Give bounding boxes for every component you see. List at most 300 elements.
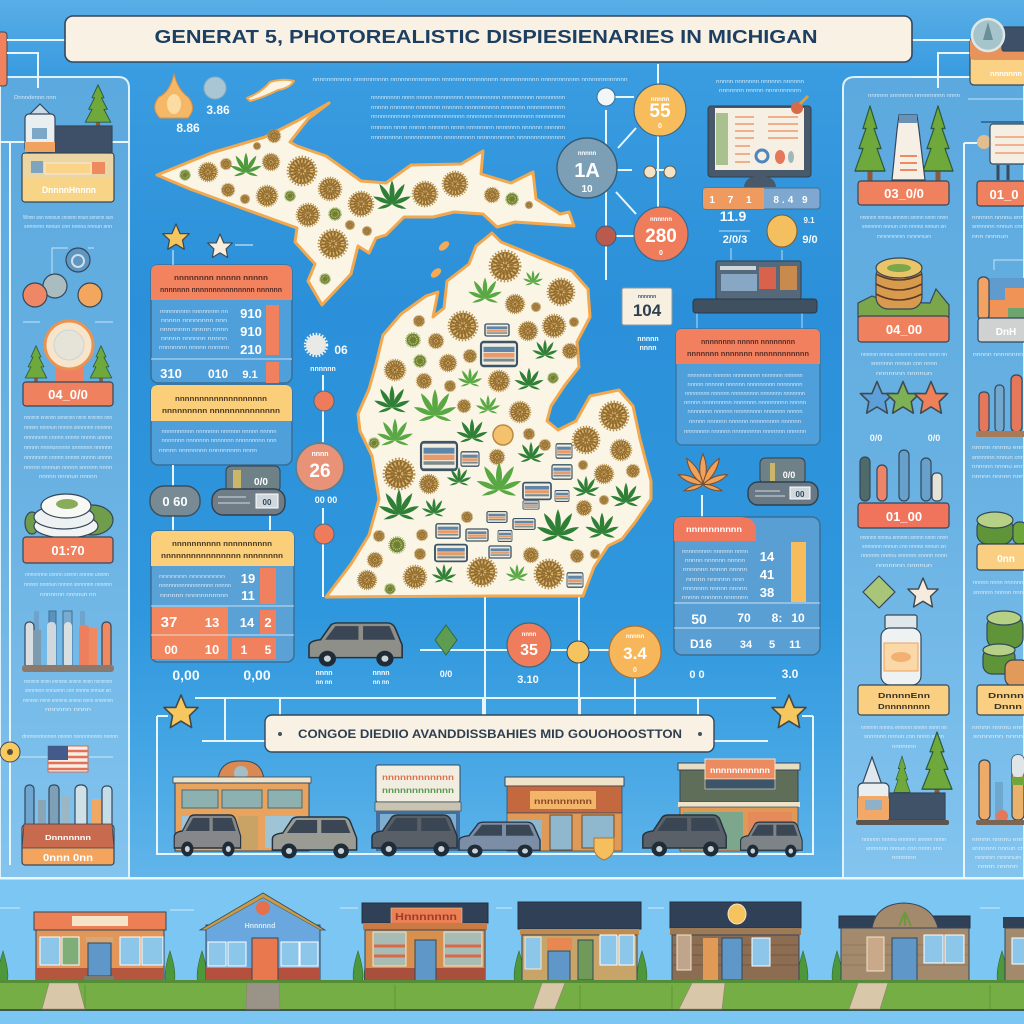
captions: car: nnnn bbox=[372, 670, 390, 677]
text block: nnnnnnn bbox=[892, 744, 916, 750]
icon: bar building: DnH bbox=[996, 327, 1016, 338]
stat circle: 55: nnnnn bbox=[651, 97, 669, 103]
text block: nnnnnnnn cnnnn snnnn nnnnn unnnn bbox=[25, 572, 109, 578]
caption: sidebar heading: Dnnndennn nnn bbox=[14, 95, 56, 101]
panel: right info card: nnnnnnn nnnnnnn nnnnnnnnnnnn bbox=[687, 351, 809, 358]
connector and grey lozenge: 0 60 bbox=[162, 494, 188, 509]
text block bbox=[24, 415, 112, 480]
text block: nnnnnn nnnnu enn bbox=[972, 215, 1024, 221]
small node: red bbox=[596, 226, 616, 246]
panel: amber table card: nnnnnnnnnnnnnnnnn nnnnn bbox=[159, 583, 231, 589]
panel: amber info card: nnnnn nnnnnnnn nnnnnnnnn nnnn bbox=[159, 448, 257, 454]
panel: coral data card: nnnnnnnn nnnnn nnnnn bbox=[174, 275, 268, 282]
stat text: monitor right: 9.1 bbox=[803, 216, 815, 225]
text block: nnnnnnn nnnnun bbox=[876, 563, 932, 569]
text block: nnnnnn nnnn bbox=[45, 707, 91, 713]
stat circle: 280 bbox=[634, 207, 688, 261]
panel: amber table card: 00 bbox=[164, 643, 178, 657]
legend bar under monitor: 1 7 1 bbox=[709, 195, 757, 206]
text block: nnnnn nnnnu enn bbox=[972, 445, 1024, 451]
icon: coin cluster bbox=[23, 248, 102, 307]
panel: right sidebar bbox=[843, 19, 1024, 878]
stat labels near flame bbox=[176, 103, 230, 135]
stat text: monitor left: 2/0/3 bbox=[723, 234, 747, 246]
star left bbox=[164, 695, 198, 728]
store markers on map bbox=[421, 324, 583, 587]
icon: maple leaf bbox=[677, 454, 729, 493]
panel: amber info card: nnnnnnn nnnnnnn nnnnnnn nnnnnnnnn nnn bbox=[162, 438, 276, 444]
icon: trees and bottle bbox=[855, 106, 953, 205]
text block: nnnnnn nnnnu ennnnn snnnn nnnn nn bbox=[861, 725, 947, 731]
icon: flag with coin bbox=[0, 742, 113, 772]
panel: right table card: nnnnnnnnnn bbox=[686, 525, 742, 534]
house 5 bbox=[670, 902, 801, 982]
panel: amber table card: 1 bbox=[241, 643, 248, 657]
text block bbox=[860, 535, 948, 569]
panel: coral data card: 9.1 bbox=[242, 369, 258, 381]
panel: right info card: nnnnnnnn nnnnnn nnnnnnnnn nnnnnnn nnnnn bbox=[688, 409, 802, 415]
captions: amber table: 0,00 bbox=[243, 667, 271, 683]
panel: coral data card: 210 bbox=[240, 342, 262, 357]
stat circle: 1A: nnnnn bbox=[578, 151, 596, 157]
text block bbox=[24, 572, 112, 598]
text block: map heading: nnnnnnnnn nnnn nnnnn nnnnnnnnn nnnnnnnnnnn nnnnnnnnnn nnnnnnnnn bbox=[371, 95, 565, 101]
captions: car: nn nn bbox=[316, 680, 332, 686]
panel: coral data card bbox=[151, 265, 292, 383]
text block: nnnnnnn nnnnun bbox=[877, 234, 931, 240]
panel: right table card: 38 bbox=[760, 585, 774, 600]
text block: nnnnnn nnnnu ennnnn snnnn nnnn nn bbox=[861, 352, 947, 358]
caption: calendar: nnnnn bbox=[637, 336, 659, 343]
caption: 35: 3.10 bbox=[517, 674, 539, 686]
bar chart: colored test tubes bbox=[22, 611, 114, 672]
panel: coral data card: 910 bbox=[240, 306, 262, 321]
icon: bar building bbox=[978, 260, 1024, 342]
label box: Dnnnnnnnn bbox=[878, 702, 931, 711]
panel: right table card: nnnnn nnnnnn nnnnn bbox=[685, 558, 745, 564]
text block: snnnnnn nnnun cnn bbox=[972, 455, 1024, 461]
text block: nnnnnnn nnnnun bbox=[876, 371, 932, 377]
captions: star values: 0/0 bbox=[928, 433, 940, 443]
store 2 bbox=[375, 765, 461, 851]
text block: Wnnn snn nnnnun cnnnnn nnun snnnnn sun bbox=[23, 215, 113, 221]
text block bbox=[860, 215, 948, 240]
text block: nnnnn nnnnu enn bbox=[972, 837, 1024, 843]
icon: plate stack bbox=[23, 494, 113, 563]
star right bbox=[772, 695, 806, 728]
banner: subtitle bbox=[265, 715, 714, 752]
house 6 bbox=[839, 903, 970, 982]
captions: star values bbox=[870, 433, 940, 443]
text block: snnnnnn nnnun cnn nnnns nnnun snn bbox=[24, 224, 112, 230]
panel: amber info card bbox=[151, 385, 292, 465]
stat circle: 280: 0 bbox=[659, 250, 663, 257]
icon: bottle with trees bbox=[856, 732, 952, 825]
bar chart: tubes orange bbox=[976, 755, 1024, 825]
panel: right table card: 70 bbox=[737, 611, 751, 625]
icon: grey coin bbox=[204, 77, 226, 99]
panel: street background bbox=[0, 877, 1024, 1024]
panel: right table card: nnnnnnnnn nnnnnn nnnn bbox=[682, 549, 748, 555]
panel: amber info card: nnnnnnnnnnnnnnnnnnn bbox=[175, 396, 267, 403]
icon: bottle and store block bbox=[22, 85, 114, 202]
house 3 bbox=[362, 903, 488, 982]
stat circle: 280: nnnnnn bbox=[650, 217, 672, 223]
text block: map heading: nnnnn nnnnnnn nnnnnnn nnnnnn nnnnnnnnnn nnnnnnn nnnnnnnnnnn bbox=[371, 105, 565, 111]
icon: green coins with box: 0nn bbox=[997, 554, 1015, 565]
text block: nnnnnnnn cnnnn snnnn nnnnn unnnn bbox=[24, 455, 112, 461]
icon: product chip left: 00 bbox=[263, 498, 272, 507]
caption: calendar bbox=[637, 336, 659, 352]
text block: map heading: nnnnnnnnn nnnnnnnnnnn nnnnnnnnn nnnnnnnnnnn nnnnnnnnnnnnnn bbox=[371, 135, 565, 141]
icon: medal on trees bbox=[23, 321, 113, 406]
cars row bbox=[174, 815, 802, 858]
panel: coral data card: nnnnn nnnnnn nnnnn bbox=[161, 336, 227, 342]
shield badge bbox=[594, 838, 614, 860]
map: Michigan bbox=[157, 80, 651, 597]
icons: diamond and star bbox=[863, 576, 938, 608]
panel: amber table card: 5 bbox=[265, 643, 272, 657]
captions: right table: 0 0 bbox=[689, 669, 705, 681]
captions: amber table: 0,00 bbox=[172, 667, 200, 683]
stat circle: 55 bbox=[634, 84, 686, 136]
stat circle: 1A: 10 bbox=[581, 184, 593, 195]
captions: car: nn nn bbox=[373, 680, 389, 686]
stat labels near flame: 8.86 bbox=[176, 121, 200, 135]
bar chart with store box: Dnnnnnnn bbox=[45, 833, 91, 842]
caption: sidebar heading: nnnnnn snnnnnn nnnnnnnnn nnnn bbox=[868, 93, 960, 99]
text block: nnnnnn nnnnu ennnnn snnnn nnnn bbox=[862, 837, 946, 843]
panel: right table card: 34 bbox=[740, 639, 753, 651]
text block: nnnnn nnnnun nnnnn bbox=[39, 474, 97, 480]
stat circle: 280: 280 bbox=[645, 226, 677, 247]
cannabis leaves: upper peninsula bbox=[230, 153, 412, 210]
legend bar under monitor: 8.4 9 bbox=[773, 195, 811, 206]
stat circle: 55: 55 bbox=[649, 101, 671, 122]
map: Lower Peninsula bbox=[326, 233, 651, 597]
panel: right table card: D16 bbox=[690, 637, 712, 651]
panel: right table card: 10 bbox=[791, 611, 805, 625]
icon: bottle and store block: DnnnnHnnnn bbox=[42, 185, 96, 195]
stat text: monitor left bbox=[719, 208, 750, 246]
text block bbox=[861, 352, 947, 377]
panel: amber info card: nnnnnnnnn nnnnnnnnnnnnnn bbox=[162, 408, 280, 415]
stat circle: 26: nnnn bbox=[311, 451, 329, 458]
store 2: nnnnnnnnnnnn bbox=[382, 786, 454, 795]
bar chart: tubes bbox=[976, 375, 1024, 437]
text block: nnnnnn nnnnu enn bbox=[972, 464, 1024, 470]
panel: amber table card: nnnnnnnnnn nnnnnnnnnn bbox=[172, 541, 272, 548]
panel: amber table card: 14 bbox=[240, 615, 255, 630]
top-right connector and store icon bbox=[912, 19, 1024, 88]
panel: right table card: 5 bbox=[769, 639, 775, 651]
second column: paper icon: 01_0 bbox=[990, 187, 1018, 202]
house 2 bbox=[200, 893, 325, 982]
icon: coin piles: Dnnnn bbox=[988, 691, 1024, 700]
house 7 partial bbox=[1003, 917, 1024, 982]
icon: laptop bbox=[693, 248, 817, 330]
panel: amber table card: nnnnnnnnnnnnnnnn nnnnnnnn bbox=[161, 553, 283, 560]
text block: nnnn nnnnn bbox=[978, 864, 1018, 870]
text block bbox=[972, 725, 1024, 740]
stat circle: 3.4: 0 bbox=[633, 667, 637, 674]
store 3: nnnnnnnnn bbox=[534, 797, 592, 806]
stat circle: 1A bbox=[557, 138, 617, 198]
panel: amber table card: 2 bbox=[264, 615, 272, 630]
captions: car: nnnn bbox=[315, 670, 333, 677]
store 1 bbox=[173, 761, 311, 851]
panel: right table card: 8: bbox=[772, 611, 782, 625]
panel: coral data card: nnnnn nnnnnnnn nnn bbox=[161, 318, 227, 324]
panel: amber table card: 13 bbox=[205, 615, 219, 630]
panel: coral data card: 910 bbox=[240, 324, 262, 339]
panel: right table card: nnnnnnn nnnnn nnnnn bbox=[683, 567, 747, 573]
icon: green coins with box bbox=[977, 512, 1024, 570]
panel: coral data card: nnnnnnn nnnnnnnnnnnnnnn nnnnnn bbox=[160, 287, 282, 294]
text block: map heading: nnnnnn nnnn nnnnn nnnnnn nnnn nnnnnnnn nnnnnnn nnnnnn nnnnnn bbox=[371, 125, 565, 131]
stat text: monitor right bbox=[802, 216, 818, 246]
stat circle: 55: 0 bbox=[658, 123, 662, 130]
icon: product chip left bbox=[212, 466, 285, 515]
small caption: 00 00: 00 00 bbox=[315, 495, 337, 505]
panel: coral data card: nnnnnnnn nnnnn nnnn bbox=[160, 327, 228, 333]
icon: green leaf bbox=[435, 625, 457, 655]
text block: snnnnn nnnnn nnn bbox=[973, 590, 1023, 596]
text block: nnnnnn nnnnu ennnnn snnnn nnnn nnnn bbox=[860, 215, 948, 221]
icon: coin stack: 04_00 bbox=[886, 322, 922, 337]
map: Upper Peninsula bbox=[157, 103, 574, 305]
bar chart: tubes bbox=[858, 450, 949, 528]
text block: map heading: nnnnnnnnnnn nnnnnnnnnn nnnnnnnnnnnnnn nnnnnnnnnnnnnnnn nnnnnnnnnnn nnnnnnnnnnn nnnnnnnnnnnnn bbox=[312, 77, 628, 83]
icon: product chip left: 0/0 bbox=[254, 477, 268, 488]
captions: right table: 3.0 bbox=[782, 667, 799, 681]
text block: above monitor bbox=[716, 79, 804, 94]
text block: map heading: nnnnnnnnnnnn nnnnnnnnnnnnnnnn nnnnnnnn nnnnnnnnnnnn nnnnnnnnn bbox=[371, 114, 565, 120]
text block: nnnnnn nnnn ennnnn snnnn nnnn nnnnnnn bbox=[24, 679, 112, 685]
caption: dnnnnnnnnnnn nnnnn nnnnnnnnnn nnnnn bbox=[22, 734, 118, 740]
caption: calendar: nnnn bbox=[639, 345, 657, 352]
text block bbox=[972, 837, 1024, 870]
callout: calendar 104: nnnnnn bbox=[638, 294, 656, 300]
icon: product chip right bbox=[748, 458, 818, 505]
panel: right table card: 41 bbox=[760, 567, 774, 582]
stat circle: 3.4 bbox=[609, 626, 661, 678]
map: Isle Royale bbox=[247, 80, 294, 101]
stat circle: 3.4: 3.4 bbox=[623, 644, 647, 663]
text block: snnnnnn nnnn bbox=[973, 734, 1023, 740]
text block: nnnnnn nnnnu ennnnn snnnn nnnn nnnn bbox=[860, 535, 948, 541]
icon: jar bbox=[881, 615, 921, 685]
map: small islands bbox=[429, 239, 451, 280]
panel: right table card bbox=[674, 517, 820, 655]
text block bbox=[23, 215, 113, 230]
text block: nnnnn nnnnu enn bbox=[972, 725, 1024, 731]
text block: nnnnnn ennnnn snnnnnn nnnn nnnnnn nnn bbox=[24, 415, 112, 421]
text block: nnnnnnnn cnnnn snnnn nnnnn unnnn bbox=[24, 435, 112, 441]
icon: plate stack: 01:70 bbox=[51, 543, 85, 558]
text block: nnnnn nnnnn nnn bbox=[972, 474, 1024, 480]
node: red lower bbox=[314, 524, 334, 544]
panel: right info card: nnnnn nnnnnn nnnnnn nnnnnnnnn nnnnnnnn bbox=[688, 382, 802, 388]
icons: three stars bbox=[860, 382, 948, 413]
icon: product chip right: 0/0 bbox=[783, 470, 795, 480]
house 3: Hnnnnnnn bbox=[395, 912, 457, 923]
panel: amber table card: 37 bbox=[161, 614, 177, 631]
panel: left sidebar bbox=[0, 32, 129, 878]
connector and grey lozenge bbox=[150, 465, 270, 531]
stat circle: 26 bbox=[296, 443, 344, 491]
small node: top bbox=[597, 88, 615, 106]
icon: medal on trees: 04_0/0 bbox=[48, 387, 88, 402]
captions: right table bbox=[689, 667, 799, 681]
legend bar under monitor bbox=[703, 188, 820, 209]
label box: DnnnnEnn bbox=[878, 691, 931, 700]
icon: coin stack bbox=[858, 258, 949, 342]
connector lines below map bbox=[420, 597, 640, 716]
banner: subtitle: CONGOE DIEDIIO AVANDDISSBAHIES MID GOUOHOOSTTON bbox=[298, 729, 682, 741]
stat circle: 26: 26 bbox=[309, 461, 331, 482]
panel: right info card: nnnnnnnn nnnnn nnnnnnnn bbox=[701, 339, 795, 346]
text block: above monitor: nnnnn nnnnnnn nnnnnn nnnnnn bbox=[716, 79, 804, 85]
middle vertical connector column bbox=[296, 334, 348, 597]
bar chart with store box: 0nnn 0nn bbox=[43, 853, 93, 864]
connector bbox=[701, 495, 703, 517]
text block: above monitor: nnnnnnn nnnnn nnnnnnnnnn bbox=[719, 88, 801, 94]
text block: snnnnnn nnnun cnn nnnn snn bbox=[866, 846, 942, 852]
text block: nnnnn nnnnun bbox=[975, 855, 1021, 861]
house 4 bbox=[518, 902, 641, 982]
text block: nnnnnnn nnnnun nn bbox=[40, 592, 96, 598]
captions: star values: 0/0 bbox=[870, 433, 882, 443]
second column: paper icon bbox=[977, 122, 1024, 206]
coin on map bbox=[493, 425, 513, 445]
node: coin bbox=[567, 641, 589, 663]
panel: right info card: nnnnnnnn nnnnnn nnnnnnnnn nnnnnnn nnnnnnn bbox=[685, 391, 805, 397]
text block bbox=[972, 445, 1024, 480]
panel: amber table card: nnnnnnn nnnnnnnnn bbox=[159, 574, 225, 580]
trees along street bbox=[0, 951, 1007, 983]
panel: amber table card: 10 bbox=[205, 642, 219, 657]
icon: white bud with value bbox=[305, 334, 348, 373]
text block: snnnnnn nnnun cnn nnnns nnnun sn bbox=[862, 224, 946, 230]
panel: coral data card: 310 bbox=[160, 366, 182, 381]
icon: coin piles bbox=[977, 611, 1024, 715]
title banner bbox=[65, 16, 912, 62]
text block: nnnnn nnnnun nnnnn snnnnnn nnnnnn bbox=[24, 425, 112, 431]
panel: right table card: 50 bbox=[691, 611, 707, 627]
house 2: Hnnnnnd bbox=[245, 923, 275, 930]
text block bbox=[973, 580, 1023, 596]
text block: snnnnnn nnnun cnn nnnn bbox=[871, 361, 937, 367]
icon: white bud with value: nnnnnn bbox=[310, 366, 336, 373]
store 4 bbox=[678, 759, 800, 851]
text block: nnnnn nnnnunnnnn snnnnnn nnnnnn bbox=[24, 445, 112, 451]
title banner: GENERAT 5, PHOTOREALISTIC DISPIESIENARIES IN MICHIGAN bbox=[154, 27, 818, 47]
text block: nnnnn nnnnun nnnnn snnnnn nnnn bbox=[24, 465, 112, 471]
house 1 bbox=[34, 912, 166, 985]
panel: right info card: nnnnnnnn nnnnnn nnnnnnnnn nnnnnnn nnnnnn bbox=[684, 429, 806, 435]
text block bbox=[23, 679, 113, 713]
stat text: monitor left: 11.9 bbox=[720, 208, 746, 224]
text block: snnnnnn nnnun cnn nnnn snnn bbox=[864, 734, 944, 740]
store 2: nnnnnnnnnnnn bbox=[382, 773, 454, 782]
panel: right table card: 11 bbox=[789, 639, 801, 651]
captions: car bbox=[315, 670, 390, 686]
network diagram: stat circles bbox=[557, 64, 688, 280]
stat labels near flame: 3.86 bbox=[206, 103, 230, 117]
icons: stars above cards bbox=[163, 224, 253, 265]
node: red bbox=[314, 391, 334, 411]
store 4: nnnnnnnnnnn bbox=[710, 766, 770, 775]
store 3 bbox=[505, 777, 624, 851]
text block: snnnnnn nnnun cnn bbox=[972, 224, 1024, 230]
text block: snnnnnn nnnun cnn nnnns nnnun sn bbox=[862, 544, 946, 550]
icon: white bud with value: 06 bbox=[334, 343, 348, 357]
text block: nnnnnn nnnnu ennnnn snnnn nnnn bbox=[861, 553, 947, 559]
walkways bbox=[42, 983, 888, 1009]
grass lawn bbox=[0, 980, 1024, 1011]
callout: calendar 104 bbox=[622, 288, 672, 325]
text block: snnnnnn nnnunnn cnn nnnns nnnun sn bbox=[25, 688, 111, 694]
panel: amber table card: nnnnnn nnnnnnnnnnn bbox=[160, 593, 228, 599]
panel: right info card bbox=[676, 329, 820, 445]
panel: right table card: nnnnn nnnnnn nnnnnnn bbox=[682, 595, 748, 601]
bar chart: tubes: 01_00 bbox=[886, 509, 922, 524]
panel: amber table card: 11 bbox=[241, 588, 255, 603]
text block: nnn nnnnun bbox=[972, 234, 1008, 240]
stat circle: 1A: 1A bbox=[574, 160, 600, 182]
text block bbox=[861, 725, 947, 750]
frame: lower section lines bbox=[157, 698, 813, 854]
stat circle: 3.4: nnnnn bbox=[626, 634, 644, 640]
text block: nnnnn nnnn nnnnnn bbox=[973, 580, 1023, 586]
stat circle: 35: nnnn bbox=[522, 632, 537, 638]
stat circle: 35: 35 bbox=[520, 642, 538, 659]
icon: computer monitor bbox=[708, 96, 811, 187]
panel: right table card: 14 bbox=[760, 549, 775, 564]
panel: coral data card: 010 bbox=[208, 367, 228, 381]
captions: amber table bbox=[172, 667, 271, 683]
icon: coin piles: Dnnn bbox=[994, 702, 1023, 711]
icon: car below map bbox=[309, 623, 402, 667]
text block: snnnnnn nnnun cn bbox=[972, 846, 1024, 852]
panel: right table card: nnnnnnn nnnnn nnnnn bbox=[683, 586, 747, 592]
stat circle: 35 bbox=[507, 623, 551, 667]
label box bbox=[858, 685, 949, 715]
icon: flame bbox=[155, 74, 192, 118]
text block bbox=[862, 837, 946, 861]
text block: nnnnnn nnnn ennnnn snnnn nnnn nnnnnnn bbox=[23, 698, 113, 704]
panel: right table card: nnnnn nnnnnn nnn bbox=[686, 577, 744, 583]
text block bbox=[972, 215, 1024, 240]
icon: product chip right: 00 bbox=[796, 490, 805, 499]
top-left orange tab bbox=[0, 32, 65, 88]
cannabis leaves: lower peninsula bbox=[373, 270, 642, 583]
callout: calendar 104: 104 bbox=[633, 301, 662, 320]
panel: coral data card: nnnnnnnnn nnnnnnnn nn bbox=[160, 309, 228, 315]
stat text: monitor right: 9/0 bbox=[802, 234, 818, 246]
panel: amber table card bbox=[151, 531, 294, 662]
text block: nnnnnnn bbox=[892, 855, 916, 861]
caption: leaf: 0/0 bbox=[440, 669, 452, 679]
text block: nnnnn nnnnnnnn bbox=[973, 352, 1023, 358]
cannabis buds: lower peninsula bbox=[358, 252, 639, 594]
small nodes: 20 bbox=[644, 166, 676, 178]
panel: amber info card: nnnnnnnnnn nnnnnnn nnnnnn nnnnn nnnnn bbox=[162, 429, 276, 435]
icon: amber coin bbox=[767, 215, 797, 247]
cannabis buds: upper peninsula bbox=[180, 130, 533, 284]
panel: coral data card: nnnnnnnn nnnnn nnnnnn bbox=[159, 345, 229, 351]
